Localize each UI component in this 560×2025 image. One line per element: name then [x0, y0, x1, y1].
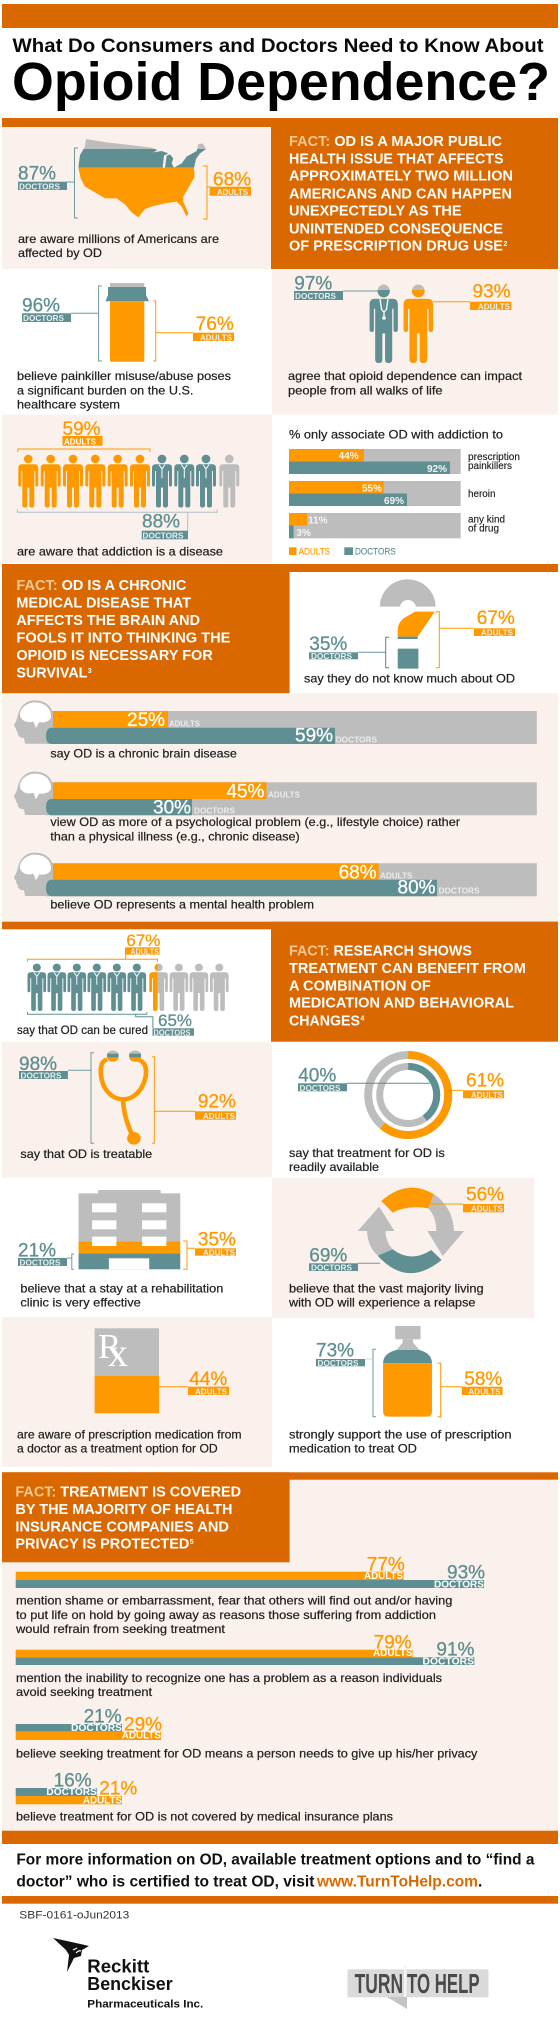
- chart: shame or embarrassment: 77%: [367, 1555, 405, 1576]
- chart: shame or embarrassment: to put life on hold by going away as reasons those suffering from addiction: [16, 1608, 436, 1622]
- caption: healthcare system: [17, 397, 120, 411]
- chart: psychological problem: [14, 772, 537, 843]
- stat: doctors 65%: [28, 1011, 194, 1037]
- caption: clinic is very effective: [20, 1295, 141, 1309]
- fact 4: 5: [190, 1539, 194, 1546]
- chart: psychological problem: ADULTS: [268, 790, 300, 800]
- caption: affected by OD: [18, 246, 102, 260]
- caption: [288, 1281, 484, 1309]
- panel: fact 3: CHANGES: [289, 1013, 360, 1029]
- chart: chronic brain disease: [14, 700, 537, 761]
- stat: doctors 97%: 97%: [294, 273, 332, 294]
- stat: adults 92%: [152, 1057, 236, 1143]
- panel: rehabilitation clinic: [18, 1190, 236, 1309]
- stat: doctors 97%: [294, 273, 380, 301]
- stat: doctors 21%: [18, 1241, 74, 1269]
- caption: a doctor as a treatment option for OD: [17, 1442, 218, 1456]
- chart: not covered by insurance: ADULTS: [83, 1796, 122, 1807]
- stat: doctors 73%: [316, 1341, 376, 1417]
- orange band: [2, 922, 558, 929]
- panel: only associate OD with addiction chart: [289, 427, 520, 557]
- stat: doctors 69%: [309, 1246, 380, 1273]
- stat: adults 35%: ADULTS: [203, 1247, 235, 1257]
- caption: are aware of prescription medication from: [17, 1428, 242, 1442]
- panel: fact 1: UNEXPECTEDLY AS THE: [289, 204, 462, 220]
- icon: question mark: [380, 579, 436, 669]
- panel: brain disease section: [2, 693, 558, 922]
- call to action: .: [478, 1873, 482, 1890]
- chart: mental health problem: DOCTORS: [439, 886, 480, 896]
- caption: strongly support the use of prescription: [289, 1428, 512, 1442]
- chart: chronic brain disease: ADULTS: [169, 719, 200, 729]
- bar group: any kind of drug: [289, 513, 505, 539]
- caption: believe painkiller misuse/abuse poses: [17, 369, 231, 383]
- stat: adults 92%: ADULTS: [203, 1111, 235, 1121]
- icon: medicine bottle: [383, 1326, 432, 1417]
- panel: fact 1: UNINTENDED CONSEQUENCE: [289, 221, 503, 237]
- panel: fact 2: AFFECTS THE BRAIN AND: [16, 613, 200, 629]
- chart: inability to recognize: mention the inability to recognize one has a problem as a reason individuals: [16, 1671, 442, 1685]
- chart: chronic brain disease: 59%: [295, 726, 333, 747]
- panel: relapse: [272, 1178, 534, 1318]
- panel: do not know much about OD: [304, 579, 515, 685]
- panel: impacts all walks of life: [272, 269, 558, 415]
- stat: doctors 87%: 87%: [18, 164, 56, 184]
- panel: fact 1: OF PRESCRIPTION DRUG USE: [289, 239, 503, 255]
- stat: adults 76%: 76%: [196, 314, 234, 335]
- icon row: ten people: [18, 455, 239, 508]
- caption: [288, 369, 523, 397]
- stat: doctors 21%: 21%: [18, 1241, 56, 1262]
- fact 4: INSURANCE COMPANIES AND: [15, 1519, 229, 1535]
- stat: doctors 65%: DOCTORS: [154, 1028, 191, 1037]
- bar group: prescription painkillers: 92%: [427, 464, 447, 475]
- bar group: prescription painkillers: painkillers: [468, 461, 512, 472]
- stat: adults 67%: ADULTS: [130, 947, 159, 956]
- icon: pill bottle: [106, 283, 149, 362]
- stat: doctors 88%: DOCTORS: [142, 530, 184, 540]
- panel: painkiller burden: [17, 283, 234, 411]
- caption: [289, 1428, 512, 1456]
- panel: insurance and privacy section: [2, 1472, 558, 1831]
- chart: chronic brain disease: DOCTORS: [336, 734, 377, 744]
- logo: Reckitt Benckiser: [53, 1938, 203, 2010]
- orange band: [2, 564, 558, 572]
- stat: adults 61%: [452, 1071, 504, 1100]
- panel: support prescription medication: [289, 1326, 512, 1456]
- caption: [289, 1146, 445, 1174]
- logo: Turn To Help: TO HELP: [407, 1968, 480, 1999]
- top orange band: [2, 4, 558, 28]
- stat: adults 44%: ADULTS: [195, 1386, 227, 1396]
- stat: doctors 88%: [17, 510, 217, 540]
- stat: adults 58%: ADULTS: [468, 1386, 501, 1396]
- call to action: [16, 1852, 535, 1890]
- panel: fact 1: 2: [504, 241, 508, 248]
- panel: fact 3: [271, 922, 558, 1042]
- stat: adults 56%: ADULTS: [471, 1204, 503, 1214]
- legend: [289, 547, 396, 557]
- panel: fact 2: 3: [88, 668, 92, 675]
- bar group: any kind of drug: any kind: [468, 515, 505, 526]
- stat: doctors 35%: 35%: [309, 634, 347, 655]
- chart: shame or embarrassment: mention shame or embarrassment, fear that others will find out and/or having: [16, 1594, 452, 1608]
- caption: [17, 369, 231, 411]
- caption: say that OD can be cured: [17, 1023, 148, 1037]
- chart: chronic brain disease: say OD is a chronic brain disease: [50, 747, 237, 761]
- chart title: % only associate OD with addiction to: [289, 427, 503, 441]
- orange band: [2, 1896, 558, 1904]
- caption: medication to treat OD: [289, 1442, 417, 1456]
- bar group: any kind of drug: 3%: [296, 528, 311, 539]
- stat: doctors 65%: 65%: [158, 1011, 192, 1030]
- stat: adults 76%: [153, 301, 234, 361]
- panel: OD is treatable: [2, 1042, 272, 1178]
- stat: adults 44%: [159, 1369, 229, 1396]
- chart: psychological problem: DOCTORS: [194, 805, 235, 815]
- stat: adults 93%: ADULTS: [478, 301, 510, 311]
- caption: [18, 232, 219, 260]
- call to action: doctor” who is certified to treat OD, visit: [16, 1873, 314, 1890]
- icon: Rx pad: R: [98, 1327, 122, 1366]
- chart: give up privacy: DOCTORS: [71, 1723, 122, 1734]
- panel: fact 1: HEALTH ISSUE THAT AFFECTS: [289, 151, 504, 167]
- logo: Turn To Help: [348, 1966, 488, 2009]
- stat: doctors 98%: DOCTORS: [20, 1070, 62, 1080]
- caption: say they do not know much about OD: [304, 671, 515, 685]
- chart: give up privacy: 29%: [124, 1714, 162, 1735]
- caption: are aware that addiction is a disease: [17, 544, 223, 558]
- stat: adults 59%: 59%: [62, 419, 101, 440]
- panel: fact 2: FOOLS IT INTO THINKING THE: [16, 631, 231, 647]
- stat: doctors 40%: DOCTORS: [300, 1083, 341, 1093]
- chart: give up privacy: 21%: [84, 1707, 122, 1728]
- chart: give up privacy: [16, 1707, 477, 1760]
- icon: adult figure: [404, 284, 433, 363]
- panel: fact 1: FACT: OD IS A MAJOR PUBLIC: [289, 134, 503, 150]
- icon: progress rings: [368, 1055, 448, 1135]
- stat: doctors 69%: DOCTORS: [311, 1263, 352, 1273]
- stat: doctors 96%: DOCTORS: [23, 313, 64, 323]
- panel: fact 2: SURVIVAL: [16, 666, 88, 682]
- stat: adults 67%: [28, 931, 160, 962]
- chart: shame or embarrassment: ADULTS: [364, 1571, 403, 1582]
- chart: inability to recognize: avoid seeking treatment: [16, 1685, 153, 1699]
- chart: inability to recognize: DOCTORS: [422, 1656, 474, 1667]
- stat: adults 61%: ADULTS: [471, 1090, 503, 1100]
- bar group: heroin: [289, 481, 496, 507]
- stat: doctors 40%: [298, 1066, 430, 1093]
- fact 4: PRIVACY IS PROTECTED: [15, 1537, 189, 1553]
- panel: fact 1: APPROXIMATELY TWO MILLION: [289, 169, 513, 185]
- stat: adults 67%: 67%: [477, 608, 515, 629]
- stat: doctors 98%: 98%: [19, 1054, 57, 1075]
- chart: give up privacy: ADULTS: [122, 1731, 161, 1742]
- bar group: any kind of drug: of drug: [468, 524, 499, 535]
- stat: doctors 88%: 88%: [142, 511, 180, 532]
- stat: doctors 98%: [19, 1053, 94, 1143]
- caption: believe that a stay at a rehabilitation: [20, 1281, 223, 1295]
- logo: Reckitt Benckiser: Pharmaceuticals Inc.: [87, 1998, 203, 2010]
- panel: fact 3: A COMBINATION OF: [289, 978, 431, 994]
- stat: adults 61%: 61%: [466, 1071, 504, 1092]
- stat: doctors 73%: DOCTORS: [318, 1358, 359, 1368]
- chart: inability to recognize: 91%: [436, 1640, 475, 1661]
- orange band: [2, 118, 558, 127]
- stat: adults 93%: [433, 282, 511, 311]
- chart: psychological problem: view OD as more of a psychological problem (e.g., lifestyle choice) rather: [50, 815, 460, 829]
- chart: psychological problem: than a physical illness (e.g., chronic disease): [50, 829, 300, 843]
- orange band: [2, 1831, 558, 1844]
- panel: fact 3: TREATMENT CAN BENEFIT FROM: [289, 961, 526, 977]
- logo: Turn To Help: TURN: [355, 1968, 403, 1999]
- icon: US map: [78, 139, 206, 218]
- stat: adults 59%: ADULTS: [64, 436, 96, 446]
- fact 4: BY THE MAJORITY OF HEALTH: [15, 1502, 232, 1518]
- icon row: ten people: [28, 964, 229, 1011]
- caption: say that treatment for OD is: [289, 1146, 445, 1160]
- chart: not covered by insurance: 21%: [99, 1779, 137, 1800]
- panel: fact 2: OPIOID IS NECESSARY FOR: [16, 648, 213, 664]
- panel: fact 3: 4: [360, 1016, 364, 1022]
- panel: fact 3: FACT: RESEARCH SHOWS: [289, 944, 472, 960]
- panel: fact 2: [2, 564, 290, 693]
- caption: say that OD is treatable: [20, 1147, 153, 1161]
- logo: Reckitt Benckiser: Benckiser: [87, 1974, 173, 1994]
- stat: adults 67%: [436, 608, 515, 668]
- chart: not covered by insurance: believe treatment for OD is not covered by medical insurance plans: [16, 1810, 393, 1824]
- chart: not covered by insurance: 16%: [54, 1771, 92, 1792]
- chart: mental health problem: 80%: [398, 878, 436, 899]
- stat: adults 67%: ADULTS: [481, 628, 513, 638]
- chart: shame or embarrassment: [15, 1555, 485, 1636]
- stat: adults 67%: 67%: [126, 931, 160, 950]
- legend: DOCTORS: [355, 547, 396, 557]
- caption: people from all walks of life: [288, 383, 443, 397]
- chart: mental health problem: believe OD represents a mental health problem: [50, 898, 314, 912]
- stat: adults 58%: 58%: [464, 1369, 502, 1390]
- title: Opioid Dependence?: [12, 52, 550, 112]
- chart: inability to recognize: [16, 1632, 475, 1699]
- stat: adults 35%: [183, 1230, 236, 1269]
- bar group: prescription painkillers: 44%: [339, 451, 359, 462]
- chart: psychological problem: 30%: [153, 797, 191, 818]
- stat: adults 58%: [438, 1363, 502, 1417]
- stat: doctors 87%: [18, 148, 78, 218]
- stat: doctors 97%: DOCTORS: [295, 291, 336, 301]
- caption: readily available: [289, 1160, 379, 1174]
- bar group: prescription painkillers: prescription: [468, 452, 520, 463]
- logo: Reckitt Benckiser: Reckitt: [87, 1957, 149, 1977]
- panel: OD can be cured: [17, 931, 229, 1037]
- panel: fact 1: AMERICANS AND CAN HAPPEN: [289, 186, 512, 202]
- chart: chronic brain disease: 25%: [127, 710, 165, 731]
- stat: adults 68%: 68%: [213, 170, 251, 191]
- panel: fact 2: MEDICAL DISEASE THAT: [16, 596, 191, 612]
- bar group: heroin: heroin: [468, 489, 496, 500]
- chart: not covered by insurance: DOCTORS: [46, 1787, 97, 1798]
- chart: shame or embarrassment: would refrain from seeking treatment: [15, 1622, 226, 1636]
- chart: mental health problem: [14, 853, 537, 912]
- icon: Rx pad: [95, 1327, 159, 1413]
- caption: believe that the vast majority living: [289, 1281, 484, 1295]
- stat: adults 93%: 93%: [472, 282, 511, 303]
- chart: inability to recognize: ADULTS: [373, 1648, 413, 1659]
- chart: mental health problem: ADULTS: [380, 870, 413, 880]
- document code: SBF-0161-oJun2013: [19, 1910, 129, 1922]
- chart: inability to recognize: 79%: [374, 1632, 412, 1653]
- icon: stethoscope: [101, 1051, 146, 1145]
- title: What Do Consumers and Doctors Need to Know About: [12, 35, 544, 57]
- icon: cycle arrows: [358, 1188, 464, 1273]
- chart: shame or embarrassment: 93%: [447, 1562, 485, 1583]
- stat: doctors 96%: 96%: [22, 296, 60, 317]
- panel: aware of millions affected: [2, 127, 271, 269]
- stat: doctors 35%: DOCTORS: [311, 651, 352, 661]
- call to action: For more information on OD, available treatment options and to “find a: [16, 1852, 535, 1869]
- caption: [20, 1281, 223, 1309]
- panel: fact 3: MEDICATION AND BEHAVIORAL: [289, 996, 514, 1012]
- stat: doctors 69%: 69%: [309, 1246, 347, 1267]
- stat: doctors 40%: 40%: [298, 1066, 336, 1087]
- fact 4: [2, 1472, 290, 1562]
- panel: fact 2: FACT: OD IS A CHRONIC: [16, 578, 187, 594]
- caption: a significant burden on the U.S.: [17, 383, 193, 397]
- chart: shame or embarrassment: DOCTORS: [434, 1579, 484, 1590]
- bar group: any kind of drug: 11%: [308, 516, 328, 527]
- caption: [17, 1428, 242, 1456]
- caption: are aware millions of Americans are: [18, 232, 219, 246]
- stat: doctors 96%: [22, 286, 102, 361]
- stat: adults 68%: [203, 166, 251, 219]
- panel: addiction is a disease: [2, 415, 272, 563]
- caption: agree that opioid dependence can impact: [288, 369, 523, 383]
- stat: adults 35%: 35%: [198, 1230, 236, 1251]
- chart: give up privacy: believe seeking treatment for OD means a person needs to give up his/her privacy: [16, 1746, 477, 1760]
- chart: not covered by insurance: [16, 1771, 393, 1824]
- bar group: prescription painkillers: [289, 449, 520, 475]
- stat: adults 68%: ADULTS: [217, 187, 248, 197]
- icon: building: [79, 1190, 180, 1269]
- panel: fact 1: [271, 118, 558, 269]
- caption: with OD will experience a relapse: [288, 1295, 476, 1309]
- chart: mental health problem: 68%: [339, 862, 377, 883]
- stat: adults 76%: ADULTS: [200, 332, 232, 342]
- panel: prescription medication awareness: [2, 1317, 272, 1467]
- legend: ADULTS: [299, 547, 330, 557]
- fact 4: FACT: TREATMENT IS COVERED: [15, 1485, 241, 1501]
- stat: adults 56%: 56%: [466, 1185, 504, 1206]
- icon: doctor figure: [370, 284, 398, 363]
- stat: doctors 73%: 73%: [316, 1341, 354, 1362]
- panel: treatment readily available: [289, 1055, 504, 1174]
- stat: adults 56%: [430, 1185, 504, 1214]
- stat: doctors 35%: [309, 634, 389, 668]
- stat: doctors 87%: DOCTORS: [19, 181, 60, 191]
- stat: doctors 21%: DOCTORS: [20, 1258, 61, 1268]
- stat: adults 59%: [18, 419, 150, 452]
- chart: psychological problem: 45%: [226, 782, 265, 803]
- call to action: www.TurnToHelp.com: [316, 1873, 478, 1890]
- bar group: heroin: 55%: [362, 484, 382, 495]
- bar group: heroin: 69%: [384, 496, 404, 507]
- icon: Rx pad: x: [108, 1330, 128, 1375]
- stat: adults 44%: 44%: [189, 1369, 227, 1390]
- stat: adults 92%: 92%: [198, 1092, 236, 1113]
